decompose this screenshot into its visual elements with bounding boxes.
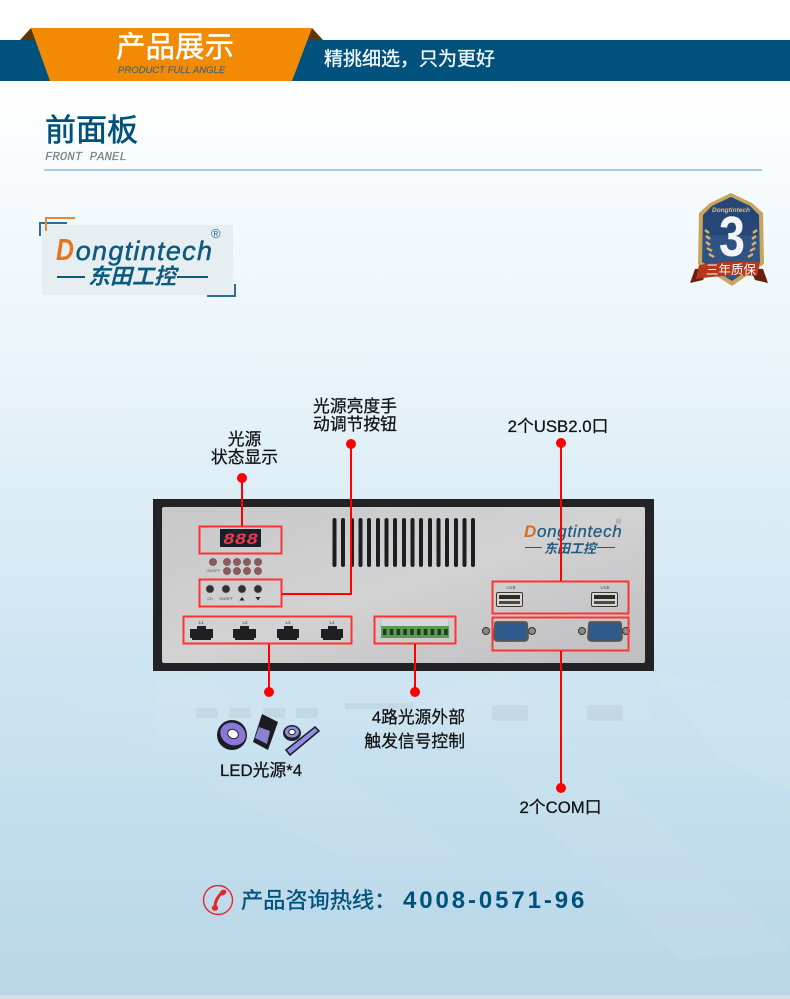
- badge ribbon text: 三年质保: [706, 263, 756, 277]
- control buttons: CH: [207, 597, 213, 601]
- green terminal block: [381, 618, 449, 638]
- light source connectors: L2: [242, 620, 248, 625]
- com ports: [482, 622, 630, 641]
- label: brightness buttons: 动调节按钮: [313, 415, 397, 434]
- indicator caption: ON/OFF: [206, 569, 221, 573]
- label: com: 2个COM口: [519, 798, 602, 817]
- label: brightness buttons: [313, 397, 397, 434]
- badge number: 3: [719, 205, 745, 269]
- callout: display: [200, 473, 282, 554]
- warranty badge: [690, 193, 768, 286]
- callout: buttons: [200, 439, 356, 606]
- banner subtitle: PRODUCT FULL ANGLE: [118, 65, 225, 76]
- usb ports: USB: [506, 585, 516, 590]
- light source connectors: L1: [198, 620, 204, 625]
- callout: connectors: [184, 616, 352, 697]
- label: external trigger: 触发信号控制: [364, 732, 465, 751]
- heading title: 前面板: [45, 113, 138, 148]
- control buttons: [206, 585, 262, 601]
- callout: usb: [492, 438, 628, 614]
- seven segment display: 888: [223, 531, 258, 549]
- light source connectors: L3: [285, 620, 291, 625]
- device reflection: [196, 703, 623, 721]
- header banner: [0, 28, 790, 81]
- icon: led lights: [217, 714, 320, 756]
- logo chinese name: 东田工控: [88, 264, 176, 289]
- control buttons: ON/OFF: [219, 597, 234, 601]
- seven segment display: [220, 529, 261, 549]
- logo wordmark: ongtintech: [76, 236, 213, 266]
- label: usb: 2个USB2.0口: [508, 417, 608, 436]
- brand logo: [39, 217, 236, 297]
- panel brand: Dongtintech: [524, 522, 622, 541]
- label: status display: 光源: [228, 430, 261, 449]
- label: led: LED光源*4: [220, 761, 302, 780]
- badge brand: Dongtintech: [712, 207, 750, 214]
- hotline: [202, 885, 587, 916]
- label: status display: 状态显示: [211, 448, 278, 467]
- panel brand: ®: [616, 518, 622, 526]
- logo wordmark: D: [56, 232, 75, 267]
- panel brand: 东田工控: [544, 541, 598, 556]
- light source connectors: [190, 620, 343, 640]
- label: external trigger: 4路光源外部: [372, 708, 465, 727]
- logo registered mark: ®: [211, 226, 221, 241]
- indicator lights: [209, 558, 262, 575]
- icon: phone: [202, 885, 234, 916]
- ventilation slots: [332, 518, 475, 567]
- label: brightness buttons: 光源亮度手: [313, 397, 397, 416]
- banner title: 产品展示: [116, 31, 234, 64]
- hotline number: 4008-0571-96: [403, 887, 587, 914]
- heading rule: [44, 169, 762, 171]
- heading subtitle: FRONT PANEL: [45, 150, 127, 164]
- hotline label: 产品咨询热线：: [241, 888, 396, 913]
- usb ports: [496, 585, 618, 606]
- callout: com: [492, 618, 628, 793]
- label: external trigger: [364, 708, 465, 751]
- section heading: [44, 113, 762, 171]
- front panel device: [153, 499, 654, 671]
- light source connectors: L4: [329, 620, 335, 625]
- banner slogan: 精挑细选，只为更好: [324, 49, 495, 70]
- callout: terminal: [374, 616, 456, 697]
- usb ports: USB: [600, 585, 610, 590]
- label: status display: [211, 430, 278, 467]
- panel brand: [524, 518, 622, 556]
